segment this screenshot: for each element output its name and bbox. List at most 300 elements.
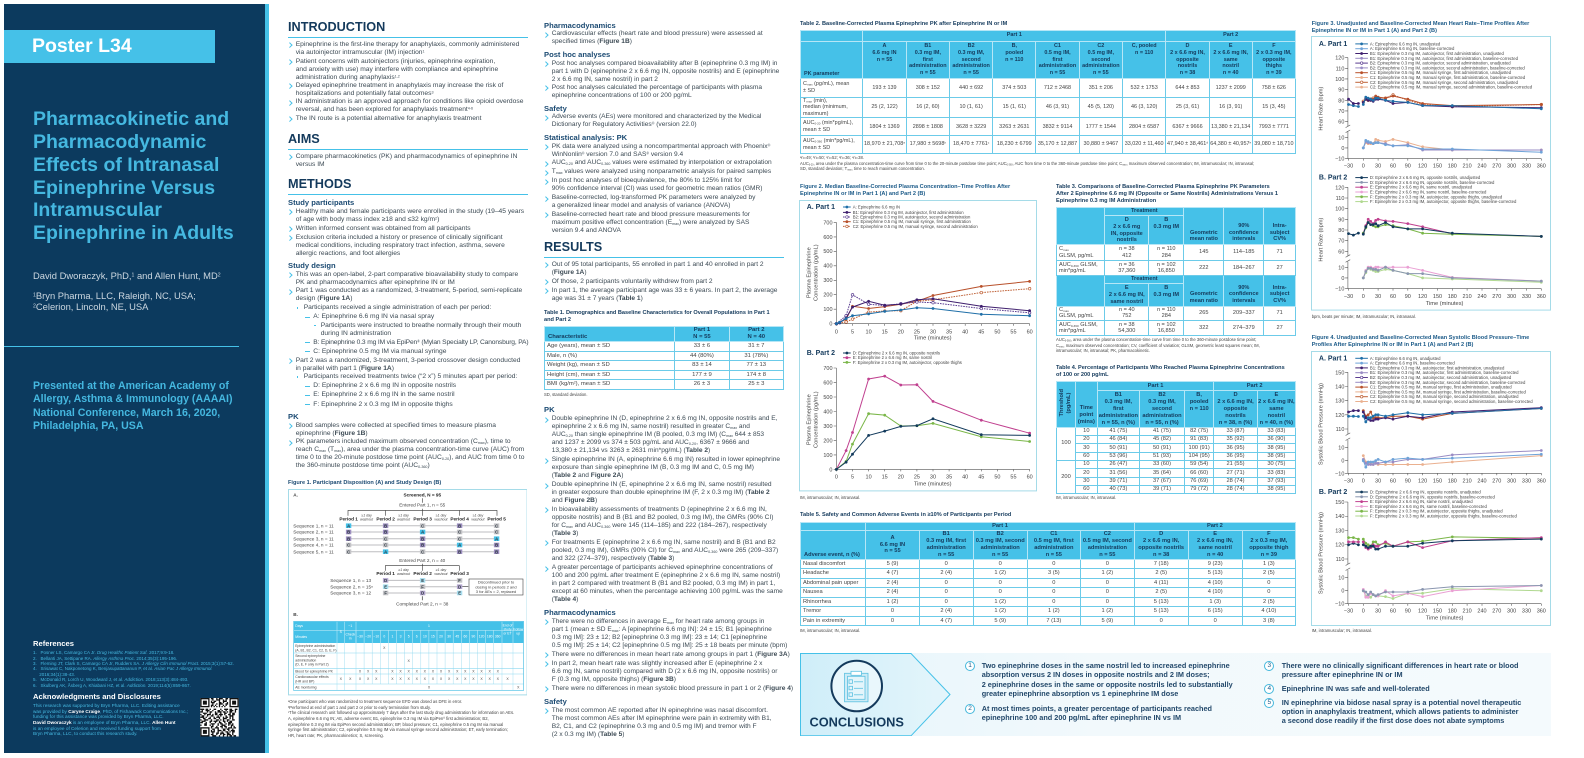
table 2: PK parameters: mean ± SD bbox=[803, 145, 830, 151]
bullet: stats 3: Tmax values were analyzed using nonparametric analysis for paired samples bbox=[552, 168, 771, 175]
chart: part 1 line chart: 25 bbox=[914, 330, 920, 336]
table 3: comparisons: mean ratio bbox=[1190, 298, 1218, 304]
bullet: PK 1 bbox=[288, 422, 496, 438]
part A disposition flow: Period 4 bbox=[450, 517, 469, 522]
table 2: PK parameters: C1 bbox=[1054, 43, 1061, 49]
title: Pharmacodynamic bbox=[33, 131, 206, 153]
table 2: PK parameters: 1237 ± 2099 bbox=[1216, 85, 1246, 91]
chart: blood pressure part 2: −10 bbox=[1335, 602, 1345, 608]
bullet: safety results: The most common AE reported after IN epinephrine was nasal discomfort. bbox=[552, 707, 768, 714]
bullet: intro 2: Patient concerns with autoinjectors (injuries, epinephrine expiration, bbox=[296, 58, 495, 65]
chart: blood pressure part 1: 300 bbox=[1507, 478, 1517, 484]
table 5: adverse events: 0 bbox=[945, 599, 948, 605]
part A disposition flow: 3 for AEs = 2, replaced bbox=[475, 589, 516, 594]
chart: part 1 line chart: Concentration (pg/mL) bbox=[814, 245, 820, 301]
part B schedule table: X bbox=[488, 670, 491, 674]
conclusion number 2: 2 bbox=[968, 705, 972, 712]
table 4: threshold percentages: B, bbox=[1196, 392, 1202, 398]
bullet: intro 3 bbox=[288, 82, 503, 98]
table 3: comparisons: IN, opposite bbox=[1111, 231, 1143, 237]
conclusion text 5: IN epinephrine via bidose nasal spray is a potential novel therapeutic bbox=[1282, 698, 1521, 707]
table 5: adverse events: 5 (13) bbox=[1208, 570, 1223, 576]
chart: blood pressure part 1: 90 bbox=[1405, 478, 1411, 484]
table 5: adverse events: administration bbox=[927, 545, 966, 551]
part A disposition flow: a bbox=[371, 585, 373, 589]
part A disposition flow: washout bbox=[397, 572, 411, 576]
table 5: adverse events: B1 bbox=[943, 531, 950, 537]
bullet: PK results 1: Double epinephrine IN (D, epinephrine 2 x 6.6 mg IN, opposite nostrils and E, bbox=[552, 415, 777, 422]
table 2: PK parameters: B, bbox=[1012, 43, 1017, 49]
chart: heart rate part 2: D: Epinephrine 2 x 6.6 mg IN, opposite nostrils, baseline-corrected bbox=[1370, 180, 1495, 185]
chart: heart rate part 2: 270 bbox=[1493, 294, 1502, 300]
table 5: adverse events: 0 bbox=[1214, 618, 1217, 624]
table 5: adverse events: 0 bbox=[945, 580, 948, 586]
bullet: PK results 4 bbox=[544, 506, 773, 538]
subheading: pharmacodynamics: Pharmacodynamics bbox=[544, 20, 616, 30]
chart: blood pressure part 2: 0 bbox=[1342, 589, 1345, 595]
table 1: demographics: 44 (80%) bbox=[690, 353, 714, 359]
table 2: PK parameters: n = 55 bbox=[1050, 70, 1065, 76]
bullet: results 2: Of those, 2 participants voluntarily withdrew from part 2 bbox=[552, 278, 713, 285]
part B schedule table: X bbox=[472, 670, 475, 674]
table 2: PK parameters: n = 38 bbox=[1180, 70, 1195, 76]
table 2: PK parameters: administration bbox=[909, 63, 947, 69]
chart: part 1 line chart: B1: Epinephrine 0.3 mg IM, autoinjector, first administration bbox=[853, 210, 964, 215]
chart: heart rate part 2: F: Epinephrine 2 x 0.3 mg IM, autoinjector, opposite thighs, baseline-corrected bbox=[1370, 199, 1517, 204]
table 1: demographics: 83 ± 14 bbox=[692, 362, 712, 368]
table 5: adverse events: n = 55 bbox=[938, 552, 954, 558]
table 3: comparisons: 27 bbox=[1277, 325, 1283, 331]
part A disposition flow: Screened, N = 95 bbox=[403, 493, 441, 498]
part A disposition flow: B bbox=[384, 530, 387, 535]
chart: part 1 line chart: 200 bbox=[824, 293, 833, 299]
chart: blood pressure part 2: 210 bbox=[1463, 609, 1472, 615]
part A disposition flow: C bbox=[495, 530, 498, 535]
part A disposition flow: C bbox=[384, 537, 387, 542]
acknowledgments text: This research was supported by Bryn Pharma, LLC. Editing assistance bbox=[33, 703, 180, 708]
table 4: threshold percentages: 51 (93) bbox=[1153, 453, 1171, 459]
bullet: intro 4: reversal, and has been explored for anaphylaxis treatment4-6 bbox=[296, 106, 473, 113]
table 3: comparisons: D bbox=[1125, 217, 1129, 223]
part A disposition flow: Sequence 2, n = 11 bbox=[293, 530, 334, 535]
treatment C: C: Epinephrine 0.5 mg IM via manual syringe bbox=[313, 348, 446, 355]
chart: heart rate part 1: 300 bbox=[1507, 164, 1517, 170]
table 2: PK parameters: first bbox=[923, 56, 933, 62]
acknowledgments text: Bryn Pharma, LLC, to conduct this research study. bbox=[33, 731, 137, 736]
bullet: intro 1: Epinephrine is the first-line therapy for anaphylaxis, commonly administered bbox=[296, 41, 519, 48]
chart: part 2 line chart: 100 bbox=[824, 453, 833, 459]
table 2: PK parameters: 2898 ± 1808 bbox=[913, 124, 943, 130]
title: Intramuscular bbox=[33, 199, 162, 221]
table 4: threshold percentages: 36 (90) bbox=[1267, 436, 1285, 442]
bullet: PK results 6 bbox=[544, 564, 783, 604]
chart: heart rate part 2: F: Epinephrine 2 x 0.3 mg IM, autoinjector, opposite thighs, unadjusted bbox=[1370, 195, 1503, 200]
table 2: PK parameters: Cmax (pg/mL), mean bbox=[803, 81, 849, 87]
icon: QR code bbox=[200, 698, 239, 736]
table 3: comparisons: n = 40 bbox=[1119, 307, 1135, 313]
part B schedule table: X bbox=[480, 670, 483, 674]
table 4 title bbox=[1056, 365, 1285, 378]
table 2: PK parameters: n = 55 bbox=[877, 56, 892, 62]
chart: part 1 line chart: 500 bbox=[824, 249, 833, 255]
conclusion text 2: epinephrine 100 and 200 pg/mL after epinephrine IN vs IM bbox=[982, 713, 1181, 722]
table 5: adverse events: 4 (7) bbox=[887, 570, 898, 576]
chart: blood pressure part 1: B1: Epinephrine 0.3 mg IM, autoinjector, first administration, unadjusted bbox=[1370, 365, 1505, 370]
table 5: adverse events: 0.3 mg IM, first bbox=[926, 538, 966, 544]
part B schedule table: X bbox=[456, 677, 459, 681]
table 5: adverse events: n = 55 bbox=[1099, 552, 1115, 558]
chart: blood pressure part 1: 130 bbox=[1336, 399, 1345, 405]
bullet: PD results 1: There were no differences in average Emax for heart rate among groups in bbox=[552, 618, 764, 625]
chart: part 2 line chart: 5 bbox=[851, 475, 854, 481]
table 3 title: After 2 Epinephrine 6.6 mg IN (Opposite or Same Nostrils) Administrations Versus 1 bbox=[1056, 191, 1278, 197]
part A disposition flow: Period 3 bbox=[413, 517, 432, 522]
part A disposition flow: ≥1 day bbox=[398, 568, 409, 572]
table 2: PK parameters: n = 55 bbox=[963, 70, 979, 76]
bullet: stats 4 bbox=[544, 177, 762, 193]
subheading: statistical analysis: Statistical analysis: PK bbox=[544, 133, 627, 142]
table 5: adverse events: 2 (4) bbox=[887, 580, 898, 586]
subheading: study participants: Study participants bbox=[288, 198, 354, 207]
table 3: comparisons: 71 bbox=[1277, 249, 1283, 255]
table 2: PK parameters: administration bbox=[1082, 63, 1120, 69]
table 1: demographics: BMI (kg/m2), mean ± SD bbox=[547, 381, 610, 387]
chart: part 1 line chart: B2: Epinephrine 0.3 mg IM, autoinjector, second administration bbox=[853, 215, 971, 220]
references list: 2016;34(1):38-43. bbox=[39, 672, 75, 677]
part B schedule table: 60 bbox=[463, 635, 467, 639]
part B schedule table: Second epinephrine bbox=[295, 654, 325, 658]
bullet: stats 6: Baseline-corrected heart rate and blood pressure measurements for bbox=[552, 211, 750, 218]
table 4: threshold percentages: n = 55, n (%) bbox=[1145, 420, 1179, 426]
figure 1 title: Figure 1. Participant Disposition (A) and Study Design (B) bbox=[288, 480, 441, 486]
chart: heart rate part 1: −10 bbox=[1335, 157, 1345, 163]
part A disposition flow: Period 5 bbox=[487, 517, 506, 522]
table 5: adverse events: C2 bbox=[1104, 531, 1111, 537]
chart: heart rate part 1: 0 bbox=[1342, 146, 1345, 152]
part A disposition flow: D bbox=[384, 578, 387, 583]
part B schedule table: Minutes bbox=[295, 635, 307, 639]
part A disposition flow: B bbox=[347, 530, 350, 535]
affiliations: 2Celerion, Lincoln, NE, USA bbox=[33, 301, 148, 312]
bullet: stats 1: PK data were analyzed using a noncompartmental approach with Phoenix® bbox=[552, 143, 770, 150]
chart: heart rate part 2 bbox=[1319, 175, 1546, 307]
part B schedule table: 1 bbox=[391, 635, 393, 639]
table 2: PK parameters: n = 55 bbox=[920, 70, 936, 76]
chart: heart rate part 2: 0 bbox=[1342, 276, 1345, 282]
table 1: demographics bbox=[544, 326, 784, 390]
references list: 3. Fleming JT, Clark S, Camargo CA Jr, Rudders SA. J Allergy Clin Immunol Pract. 2015;3(1):57-62. bbox=[33, 661, 234, 666]
bullet: design 3 bbox=[288, 357, 520, 373]
table 3: comparisons: n = 102 bbox=[1157, 262, 1176, 268]
chart: blood pressure part 1: A: Epinephrine 6.6 mg IN, baseline-corrected bbox=[1370, 361, 1456, 366]
table 5: adverse events: 1 (2) bbox=[1048, 608, 1060, 614]
part B schedule table: 5 bbox=[407, 635, 409, 639]
part A disposition flow: Sequence 2, n = 15 bbox=[330, 585, 371, 590]
table 3: comparisons: Treatment bbox=[1131, 276, 1158, 282]
table 4: threshold percentages: 41 (75) bbox=[1153, 428, 1171, 434]
table 2 title: Table 2. Baseline-Corrected Plasma Epinephrine PK after Epinephrine IN or IM bbox=[800, 21, 1007, 27]
bullet: stats 1 bbox=[544, 143, 770, 159]
acknowledgments text: David Dworaczyk is an employee of Bryn Pharma, LLC. Allen Hunt bbox=[33, 720, 176, 725]
table 3: comparisons: 752 bbox=[1122, 313, 1131, 319]
table 1: demographics: N = 40 bbox=[748, 334, 765, 340]
table 2: PK parameters: 39,080 ± 18,710 bbox=[1254, 141, 1293, 147]
figure 1 footnotes bbox=[288, 699, 514, 738]
part B schedule table: X bbox=[407, 677, 410, 681]
table 5: adverse events: 1 (2) bbox=[1101, 570, 1113, 576]
bullet: intro 3: Delayed epinephrine treatment in anaphylaxis may increase the risk of bbox=[296, 82, 503, 89]
table 3: comparisons: n = 36 bbox=[1119, 262, 1135, 268]
table 4: threshold percentages: opposite bbox=[1224, 406, 1247, 412]
part B schedule table: X bbox=[448, 670, 451, 674]
table 2: PK parameters: 3628 ± 3229 bbox=[956, 124, 986, 130]
chart: blood pressure part 1: C2: Epinephrine 0.5 mg IM, manual syringe, second administration, unadjusted bbox=[1370, 394, 1520, 399]
chart: blood pressure part 2: 120 bbox=[1336, 543, 1345, 549]
chart: heart rate part 1: 100 bbox=[1336, 77, 1345, 83]
table 5: adverse events: 0 bbox=[1267, 580, 1270, 586]
part A disposition flow: C bbox=[495, 524, 498, 529]
chart: part 2 line chart: B. Part 2 bbox=[807, 350, 835, 357]
table 4: threshold percentages: 38 (95) bbox=[1267, 445, 1285, 451]
part A disposition flow: B bbox=[421, 543, 424, 548]
chart: heart rate part 1: 60 bbox=[1390, 164, 1396, 170]
bullet: stats 2: AUC0-20 and AUC0-360 values were estimated by interpolation or extrapolation bbox=[552, 159, 772, 166]
part A disposition flow: washout bbox=[360, 518, 374, 522]
treatment F: F: Epinephrine 2 x 0.3 mg IM in opposite thighs bbox=[313, 401, 453, 408]
table 5: adverse events: 7 (18) bbox=[1154, 561, 1169, 567]
table 4: threshold percentages: same bbox=[1269, 406, 1284, 412]
part B schedule table: −20 bbox=[365, 635, 371, 639]
bullet: PK results 1 bbox=[544, 415, 777, 455]
acknowledgments heading: Acknowledgments and Disclosures bbox=[33, 692, 161, 701]
part A disposition flow bbox=[293, 493, 523, 607]
table 2: PK parameters: 644 ± 853 bbox=[1175, 85, 1200, 91]
chart: part 1 line chart: 400 bbox=[824, 264, 833, 270]
part B schedule table: X bbox=[359, 677, 362, 681]
bullet: participants 2: Written informed consent was obtained from all participants bbox=[296, 225, 471, 232]
bullet: PK results 5: pooled, 0.3 mg IM), GMRs (90% CI) for Cmax and AUC0-360 were 265 (209–337) bbox=[552, 547, 778, 554]
part A disposition flow: B bbox=[458, 524, 461, 529]
table 5: adverse events: 2 x 0.3 mg IM, bbox=[1250, 538, 1287, 544]
part A disposition flow: Sequence 1, n = 13 bbox=[330, 578, 371, 583]
part B schedule table: Follow bbox=[513, 628, 523, 632]
part A disposition flow: A bbox=[347, 524, 350, 529]
table 5: adverse events: n = 55 bbox=[1046, 552, 1062, 558]
bullet: stats 4: 90% confidence interval (CI) was used for geometric mean ratios (GMR) bbox=[552, 185, 762, 192]
table 3: comparisons: 27 bbox=[1277, 265, 1283, 271]
bullet: design 3: in parallel with part 1 (Figure 1A) bbox=[296, 365, 394, 372]
table 2: PK parameters: 3832 ± 9114 bbox=[1043, 124, 1072, 130]
chart: part 1 line chart: 30 bbox=[930, 330, 936, 336]
table 5: adverse events: 0 bbox=[891, 608, 894, 614]
bullet: PD methods: specified times (Figure 1B) bbox=[552, 38, 632, 45]
bullet: PK 1: epinephrine (Figure 1B) bbox=[296, 430, 368, 437]
table 4: threshold percentages: 53 (96) bbox=[1109, 453, 1127, 459]
table 5: adverse events: 0 bbox=[1267, 589, 1270, 595]
part B schedule table: 0 bbox=[383, 635, 385, 639]
chart: blood pressure part 2: 110 bbox=[1336, 557, 1345, 563]
part A disposition flow: C bbox=[347, 543, 350, 548]
table 2: PK parameters: 0.5 mg IM, bbox=[1044, 50, 1071, 56]
chart: blood pressure part 2: 300 bbox=[1507, 609, 1517, 615]
part A disposition flow: Period 2 bbox=[413, 571, 432, 576]
part B schedule table: or ET bbox=[503, 632, 511, 636]
table 5: adverse events: 3 (5) bbox=[1048, 570, 1060, 576]
part B schedule table: −10 bbox=[373, 635, 379, 639]
table 4: threshold percentages: 60 bbox=[1083, 453, 1090, 459]
table 1: demographics: 174 ± 8 bbox=[746, 372, 766, 378]
references heading: References bbox=[33, 639, 74, 648]
table 1: demographics: Part 1 bbox=[694, 327, 710, 333]
table 2: PK parameters: 18,970 ± 21,708a bbox=[864, 141, 905, 147]
part A disposition flow: C bbox=[384, 543, 387, 548]
subheading: safety methods: Safety bbox=[544, 104, 567, 112]
table 5: adverse events: 0 bbox=[1106, 589, 1109, 595]
part B schedule table: S bbox=[339, 630, 342, 634]
part A disposition flow: ≥1 day bbox=[361, 514, 372, 518]
table 1: demographics: 77 ± 13 bbox=[746, 362, 766, 368]
table 2: PK parameters: 6.6 mg IN bbox=[872, 50, 897, 56]
table 1: demographics: 33 ± 6 bbox=[694, 343, 710, 349]
bullet: safety methods: Adverse events (AEs) were monitored and characterized by the Medical bbox=[552, 113, 761, 120]
bullet: PK results 4: In bioavailability assessments of treatments D (epinephrine 2 x 6.6 mg IN, bbox=[552, 506, 767, 513]
authors: David Dworaczyk, PhD,1 and Allen Hunt, MD2 bbox=[33, 270, 221, 281]
table 2: PK parameters: opposite bbox=[1263, 56, 1285, 62]
part B schedule table: (A, B1, B2, C1, C2, D, E, F) bbox=[295, 649, 336, 653]
bullet: stats 5: a generalized linear model and analysis of variance (ANOVA) bbox=[552, 202, 730, 209]
table 2 footnotes: AUC 0-20, area under the plasma concentration-time curve from time 0 to the 20-minute postdose time point; AUC 0-360, AUC from time 0 to the 360-minute postdose time point; C max, maximum observed concentration; IM, intramuscular; IN, intranasal; bbox=[800, 161, 1254, 166]
chart: blood pressure part 2: D: Epinephrine 2 x 6.6 mg IN, opposite nostrils, baseline-corrected bbox=[1370, 494, 1496, 499]
chart: part 1 line chart: 0 bbox=[830, 322, 833, 328]
chart: blood pressure part 2: 140 bbox=[1336, 514, 1345, 520]
part B schedule table: up bbox=[516, 632, 520, 636]
table 5: adverse events: 0 bbox=[1052, 580, 1055, 586]
part B schedule table: X bbox=[431, 677, 434, 681]
table 5: adverse events: 0 bbox=[1052, 561, 1055, 567]
table 2: PK parameters: 46 (3, 91) bbox=[1046, 104, 1069, 110]
conclusion text 4: Epinephrine IN was safe and well-tolerated bbox=[1282, 684, 1430, 693]
bullet: intro 2 bbox=[288, 58, 498, 82]
table 4 title: of 100 or 200 pg/mL bbox=[1056, 372, 1109, 378]
table 2: PK parameters: 2 x 0.3 mg IM, bbox=[1256, 50, 1292, 56]
table 3: comparisons: 284 bbox=[1162, 253, 1171, 259]
table 2: PK parameters: 45 (5, 120) bbox=[1088, 104, 1114, 110]
table 2: PK parameters: 18,470 ± 7761c bbox=[953, 141, 989, 147]
chart: blood pressure part 2: −30 bbox=[1344, 609, 1354, 615]
table 3: comparisons: GLSM, pg/mL bbox=[1059, 313, 1094, 319]
bullet: design 1: PK and pharmacodynamics after epinephrine IN or IM bbox=[296, 279, 455, 286]
bullet: PK 2: time 0 to the 20-minute postdose time point (AUC0-20), and AUC from time 0 to bbox=[296, 454, 524, 461]
table 5: adverse events: 1 (2) bbox=[994, 570, 1006, 576]
bullet: stats 4: In post hoc analyses of bioequivalence, the 80% to 125% limit for bbox=[552, 177, 742, 184]
bullet: safety results bbox=[544, 707, 772, 739]
chart: part 2 line chart: 30 bbox=[930, 475, 936, 481]
chart: part 2 line chart: 200 bbox=[824, 439, 833, 445]
chart: part 1 line chart: 15 bbox=[882, 330, 888, 336]
table 3: comparisons: 2 x 6.6 mg bbox=[1113, 224, 1140, 230]
chart: blood pressure part 1: 120 bbox=[1418, 478, 1428, 484]
panel: left title sidebar bbox=[4, 4, 265, 753]
chart: blood pressure part 1: 330 bbox=[1522, 478, 1531, 484]
part A disposition flow: E bbox=[458, 591, 461, 596]
chart: part 1 line chart: 55 bbox=[1011, 330, 1017, 336]
table 3: comparisons: 71 bbox=[1277, 310, 1283, 316]
heading: results: RESULTS bbox=[544, 240, 602, 254]
table 2: PK parameters: n = 39 bbox=[1266, 70, 1282, 76]
table 5: adverse events: administration bbox=[1034, 545, 1073, 551]
table 4: threshold percentages: 39 (71) bbox=[1109, 478, 1127, 484]
table 2: PK parameters: Part 1 bbox=[1007, 32, 1022, 38]
table 5: adverse events: Rhinorrhea bbox=[803, 599, 831, 605]
table 2: PK parameters: C, pooled bbox=[1132, 43, 1157, 49]
part B schedule table: X bbox=[375, 670, 378, 674]
bullet: PK results 5: For treatments E (epinephrine 2 x 6.6 mg IN, same nostril) and B (B1 and B2 bbox=[552, 539, 776, 546]
part B schedule table: Check bbox=[345, 633, 355, 637]
table 5: adverse events: 6.6 mg IN bbox=[880, 542, 905, 548]
bullet: PK 2 bbox=[288, 438, 524, 470]
table 3: comparisons: 284 bbox=[1162, 313, 1171, 319]
chart: blood pressure part 1: 0 bbox=[1362, 478, 1365, 484]
table 2: PK parameters: PK parameter bbox=[804, 71, 839, 77]
references list: 1. Posner LS, Camargo CA Jr. Drug Healthc Patient Saf. 2017;9:9-18. bbox=[33, 650, 174, 655]
table 5: adverse events: 9 (23) bbox=[1208, 561, 1223, 567]
table 5: adverse events: Abdominal pain upper bbox=[803, 580, 858, 586]
bullet: safety results: B2, C1, and C2 (epinephrine 0.3 mg and 0.5 mg IM) and tremor with F bbox=[552, 723, 757, 730]
sub-sub-bullet bbox=[314, 322, 521, 338]
subheading: PK: PK bbox=[288, 412, 299, 421]
chart: part 1 line chart: 50 bbox=[995, 330, 1001, 336]
chart: heart rate part 2: 120 bbox=[1336, 186, 1345, 192]
table 2: PK parameters: AUC0-20 (min*pg/mL), bbox=[803, 120, 853, 126]
bullet: results 3: In part 1, the average participant age was 33 ± 6 years. In part 2, the average bbox=[552, 287, 777, 294]
subheading: study design: Study design bbox=[288, 261, 336, 270]
bullet: design 1 bbox=[288, 271, 518, 287]
table 4: threshold percentages: 35 (92) bbox=[1226, 436, 1245, 442]
chart: part 1 line chart: 40 bbox=[962, 330, 969, 336]
part A disposition flow: F bbox=[421, 585, 424, 590]
table 4: threshold percentages: 0.3 mg IM, bbox=[1105, 399, 1132, 405]
bullet: PK results 4: (Table 3) bbox=[552, 530, 578, 537]
table 2: PK parameters: B1 bbox=[924, 43, 931, 49]
chart: blood pressure part 1: 140 bbox=[1336, 384, 1345, 390]
table 5: adverse events: Nausea bbox=[803, 589, 823, 595]
bullet: PK results 2: Single epinephrine IN (A, epinephrine 6.6 mg IN) resulted in lower epinephrine bbox=[552, 456, 780, 463]
table 3: comparisons: Cmax bbox=[1059, 246, 1069, 252]
sidebar cyan edge stripe bbox=[265, 4, 269, 753]
table 5: adverse events: 1 (3) bbox=[1209, 599, 1221, 605]
chart: blood pressure part 1: 270 bbox=[1493, 478, 1502, 484]
table 3: comparisons: n = 38 bbox=[1119, 246, 1135, 252]
chart: heart rate part 2: 330 bbox=[1522, 294, 1531, 300]
chart: heart rate part 1: 0 bbox=[1362, 164, 1365, 170]
chart: blood pressure part 2: Systolic Blood Pressure (mmHg) bbox=[1319, 512, 1325, 594]
chart: blood pressure part 1: 110 bbox=[1336, 427, 1345, 433]
bullet: post hoc 2 bbox=[544, 84, 762, 100]
table 5: adverse events: 0 bbox=[1106, 599, 1109, 605]
table 4: threshold percentages: second bbox=[1152, 406, 1172, 412]
chart: part 2 line chart: 50 bbox=[995, 475, 1001, 481]
bullet: PD results 2: There were no differences in mean heart rate among groups in part 1 (Figure 3A) bbox=[552, 651, 790, 658]
chart: heart rate part 1: 270 bbox=[1493, 164, 1502, 170]
part B schedule table: X bbox=[423, 677, 426, 681]
figure 1 footnotes: A, epinephrine 6.6 mg IN; AE, adverse event; B1, epinephrine 0.3 mg IM via EpiPen® first administration; B2, bbox=[288, 716, 489, 721]
table 5: adverse events: 1 (3) bbox=[1263, 561, 1275, 567]
chart: part 2 line chart: 35 bbox=[946, 475, 952, 481]
part B schedule table: End of bbox=[502, 624, 512, 628]
bullet: post hoc 1: Post hoc analyses compared bioavailability after B (epinephrine 0.3 mg IM) in bbox=[552, 60, 777, 67]
table 3: comparisons: 16,850 bbox=[1158, 268, 1175, 274]
chart: part 1 line chart: A. Part 1 bbox=[807, 204, 835, 211]
